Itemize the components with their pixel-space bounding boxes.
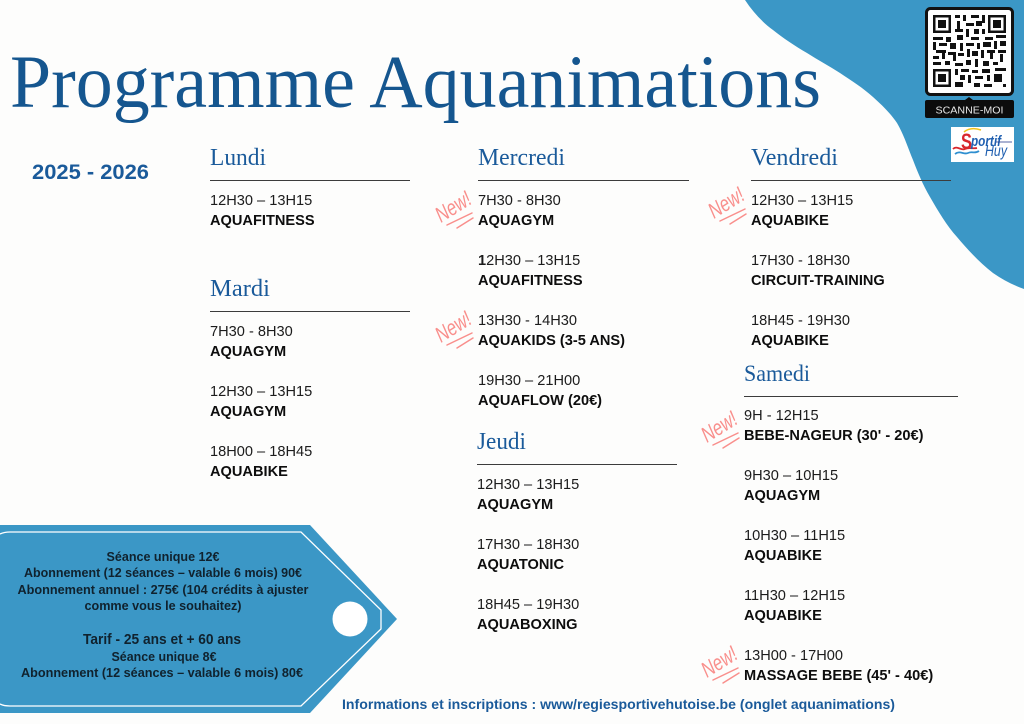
column: Vendredi and Samedi: [744, 145, 958, 684]
session: 10H30 – 11H15: [744, 528, 845, 544]
prices: Abonnement (12 séances – valable 6 mois) 90€: [24, 566, 302, 580]
session: [210, 324, 293, 360]
prices: Séance unique 12€: [106, 550, 220, 564]
heading: Vendredi: Vendredi: [751, 145, 838, 171]
session: AQUATONIC: [477, 557, 564, 573]
new badge: Samedi 9H: New!: [696, 406, 742, 447]
prices: Tarif - 25 ans et + 60 ans: [83, 632, 241, 648]
session: [744, 468, 838, 504]
session: AQUAGYM: [744, 488, 820, 504]
new badge: Mercredi 13H30: New!: [430, 306, 476, 347]
logo: centre sportif local Huy: Huy: [985, 143, 1008, 160]
session: [478, 373, 602, 409]
heading: Mardi: Mardi: [210, 276, 270, 302]
season label: 2025 - 2026: [32, 160, 149, 184]
session: 18H45 - 19H30: [751, 313, 850, 329]
session: AQUAGYM: [210, 404, 286, 420]
prices: comme vous le souhaitez): [84, 599, 242, 613]
logo: centre sportif local Huy: portif: [970, 133, 1003, 150]
session: AQUABOXING: [477, 617, 578, 633]
session: 11H30 – 12H15: [744, 588, 845, 604]
session: AQUAGYM: [478, 213, 554, 229]
tag hole: [332, 602, 368, 636]
session: 12H30 – 13H15: [751, 193, 853, 209]
scan label: SCANNE-MOI: [936, 104, 1004, 116]
prices: Séance unique 8€: [112, 650, 216, 664]
session: 19H30 – 21H00: [478, 373, 580, 389]
session: AQUABIKE: [744, 548, 822, 564]
new badge: Mercredi 7H30: New!: [430, 186, 476, 227]
session: AQUAKIDS (3-5 ANS): [478, 333, 625, 349]
session: [751, 253, 885, 289]
heading: Samedi: Samedi: [744, 361, 810, 386]
session: [478, 253, 583, 289]
session: 17H30 – 18H30: [477, 537, 579, 553]
session: [744, 648, 933, 684]
session: [210, 193, 315, 229]
prices: Abonnement annuel : 275€ (104 crédits à ajuster: [18, 583, 309, 597]
session: AQUAFITNESS: [478, 273, 583, 289]
column: Mercredi and Jeudi: [477, 145, 689, 633]
session: [744, 528, 845, 564]
heading: Mercredi: Mercredi: [478, 145, 565, 171]
session: AQUAFITNESS: [210, 213, 315, 229]
new badge: Vendredi 12H30: [703, 182, 749, 224]
heading: Jeudi: Jeudi: [477, 429, 526, 455]
session: BEBE-NAGEUR (30' - 20€): [744, 428, 924, 444]
QR code card: [926, 8, 1012, 94]
session: 17H30 - 18H30: [751, 253, 850, 269]
session: 9H30 – 10H15: [744, 468, 838, 484]
new badge: Samedi 9H: [696, 406, 742, 448]
session: 7H30 - 8H30: [210, 324, 293, 340]
session: [478, 193, 561, 229]
title: Programme Aquanimations: [10, 41, 821, 124]
new badge: Mercredi 13H30: [430, 306, 476, 348]
session: AQUAGYM: [210, 344, 286, 360]
scan label: [925, 97, 1014, 118]
session: 13H00 - 17H00: [744, 648, 843, 664]
new badge: Samedi 13H00: New!: [696, 641, 742, 682]
session: [744, 408, 924, 444]
session: 18H00 – 18H45: [210, 444, 312, 460]
session: AQUABIKE: [751, 333, 829, 349]
session: [210, 384, 312, 420]
session: [478, 313, 625, 349]
session: [477, 477, 579, 513]
prices: Abonnement (12 séances – valable 6 mois) 80€: [21, 666, 303, 680]
session: AQUABIKE: [744, 608, 822, 624]
session: AQUAGYM: [477, 497, 553, 513]
session: MASSAGE BEBE (45' - 40€): [744, 668, 933, 684]
logo: centre sportif local Huy: [951, 127, 1014, 162]
session: 13H30 - 14H30: [478, 313, 577, 329]
session: 12H30 – 13H15: [478, 253, 580, 269]
new badge: Samedi 13H00: [696, 641, 742, 683]
session: [751, 193, 853, 229]
session: 18H45 – 19H30: [477, 597, 579, 613]
price tag: [0, 525, 397, 713]
logo: centre sportif local Huy: S: [961, 129, 972, 154]
session: [477, 597, 579, 633]
new badge: Mercredi 7H30: [430, 186, 476, 228]
session: 9H - 12H15: [744, 408, 819, 424]
new badge: Vendredi 12H30: New!: [703, 182, 749, 223]
session: AQUABIKE: [210, 464, 288, 480]
prices: [18, 550, 309, 680]
session: CIRCUIT-TRAINING: [751, 273, 885, 289]
footer information line: Informations et inscriptions : www/regiesportivehutoise.be (onglet aquanimations): [342, 696, 895, 712]
session: 12H30 – 13H15: [210, 193, 312, 209]
session: 12H30 – 13H15: [477, 477, 579, 493]
session: AQUAFLOW (20€): [478, 393, 602, 409]
heading: Lundi: Lundi: [210, 145, 266, 171]
session: [751, 313, 850, 349]
session: [744, 588, 845, 624]
session: [477, 537, 579, 573]
session: 7H30 - 8H30: [478, 193, 561, 209]
column: Lundi and Mardi: [210, 145, 410, 480]
session: AQUABIKE: [751, 213, 829, 229]
session: 12H30 – 13H15: [210, 384, 312, 400]
session: [210, 444, 312, 480]
blue corner shape: [745, 0, 1024, 289]
